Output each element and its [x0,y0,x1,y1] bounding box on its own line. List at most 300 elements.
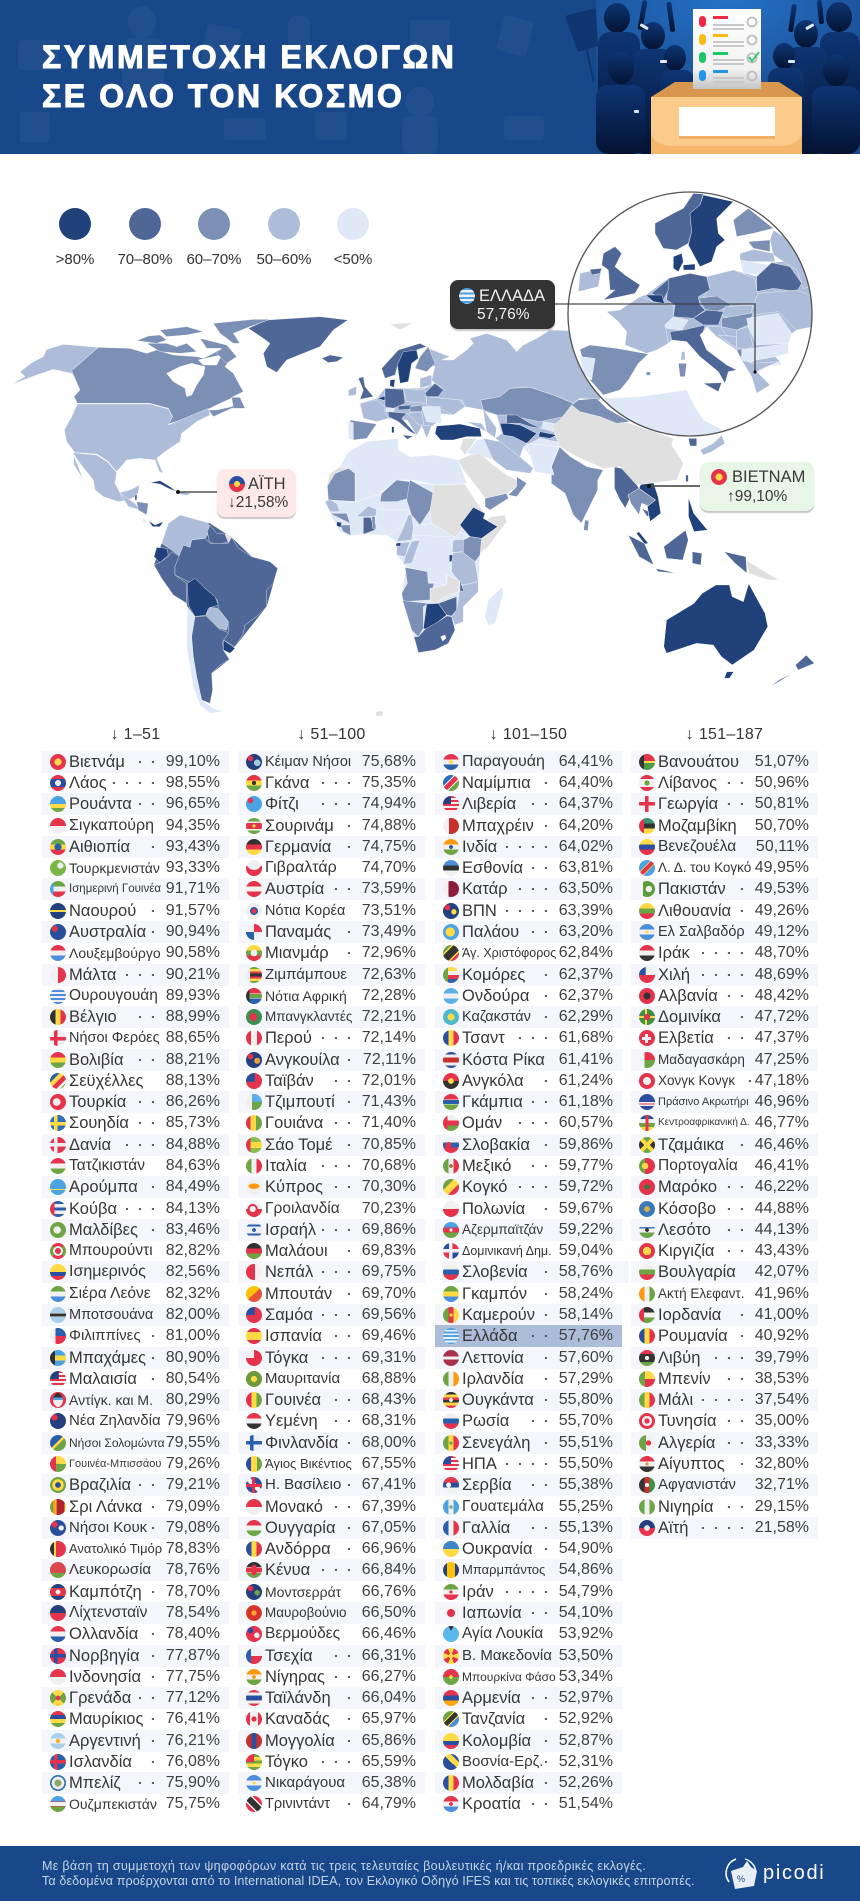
row: Παραγουάη: 64,41% [559,753,613,770]
logo: picodi [723,1856,820,1891]
row: Σάο Τομέ: 70,85% [362,1136,416,1153]
row: Τόγκο: 65,59% [362,1753,416,1770]
row: Μάλτα: Μάλτα [69,966,116,984]
row: Γουινέα-Μπισσάου: Γουινέα-Μπισσάου [69,1458,161,1470]
row: Νήσοι Σολομώντα [42,1432,229,1453]
row: Ελ Σαλβαδόρ: 49,12% [755,923,809,940]
row: Ανατολικό Τιμόρ: Ανατολικό Τιμόρ [69,1541,162,1556]
row: Νήσοι Σολομώντα: Νήσοι Σολομώντα [69,1436,165,1450]
row: Ουζμπεκιστάν: Ουζμπεκιστάν [69,1796,157,1812]
ranking column: 51-100 [238,751,425,1812]
row: Μπουρούντι: 82,82% [166,1242,220,1259]
row: Μπελίζ: 75,90% [166,1774,220,1791]
row: Νίγηρας: 66,27% [362,1668,416,1685]
row: Ιράκ: Ιράκ [658,944,690,962]
row: Ομάν: Ομάν [462,1114,502,1132]
row: Ινδία: 64,02% [559,838,613,855]
row: Πολωνία: 59,67% [559,1200,613,1217]
row: Ιαπωνία: Ιαπωνία [462,1604,522,1622]
row: Άγιος Βικέντιος [238,1453,425,1474]
row: Μογγολία: 65,86% [362,1732,416,1749]
row: Σλοβακία: 59,86% [559,1136,613,1153]
row: Γκαμπόν: 58,24% [559,1285,613,1302]
row: Άγ. Χριστόφορος [435,942,622,964]
row: Αργεντινή: 76,21% [166,1732,220,1749]
row: Τατζικιστάν: 84,63% [166,1157,220,1174]
row: Καμπότζη [50,1583,220,1601]
row: Αργεντινή: Αργεντινή [69,1732,141,1750]
row: Τουρκμενιστάν: 93,33% [166,859,220,876]
row: Μαλδίβες: Μαλδίβες [69,1221,138,1239]
row: Ιρλανδία [435,1368,622,1389]
row: Σαμόα [238,1304,425,1325]
row: ΒΠΝ [435,900,622,921]
row: Τσεχία: 66,31% [362,1646,416,1664]
row: Αρούμπα [42,1176,229,1198]
row: Βοσνία-Ερζ.: 52,31% [559,1753,613,1770]
row: Ιρλανδία: 57,29% [559,1370,613,1387]
row: Καναδάς [238,1708,425,1730]
row: Νιγηρία: 29,15% [755,1498,809,1515]
row: Γροιλανδία: Γροιλανδία [265,1200,340,1217]
row: Παναμάς: 73,49% [362,923,416,940]
row: Μπαρμπάντος: 54,86% [559,1561,613,1578]
row: Αυστραλία: 90,94% [166,923,220,940]
row: Αντίγκ. και Μ.: Αντίγκ. και Μ. [69,1392,153,1408]
row: Ουκρανία: Ουκρανία [462,1540,532,1558]
row: Κιργιζία: 43,43% [755,1242,809,1259]
callout: Vietnam [700,462,814,511]
row: Λιβύη: Λιβύη [658,1349,700,1367]
row: Ακτή Ελεφαντ.: 41,96% [755,1285,809,1302]
row: Η. Βασίλειο: Η. Βασίλειο [265,1476,341,1493]
row: Λάος [50,774,220,792]
row: Πορτογαλία: 46,41% [755,1157,809,1174]
row: Βενεζουέλα [631,836,818,857]
row: Κιργιζία [631,1240,818,1261]
row: Αυστραλία [42,921,229,942]
row: Τσαντ [435,1027,622,1049]
row: Αφγανιστάν: Αφγανιστάν [658,1476,736,1493]
row: Βολιβία: 88,21% [166,1051,220,1068]
row: Λιθουανία: 49,26% [755,902,809,919]
row: Ισλανδία: 76,08% [166,1753,220,1770]
row: Σαμόα: 69,56% [362,1306,416,1323]
row: Σερβία: Σερβία [462,1476,512,1494]
row: Ιταλία [246,1157,416,1175]
row: Καναδάς: 65,97% [362,1710,416,1727]
row: Γεωργία: 50,81% [755,795,809,812]
row: Γρενάδα: 77,12% [166,1689,220,1706]
row: Μπαχρέιν [435,815,622,836]
row: Γουινέα-Μπισσάου: 79,26% [166,1455,220,1472]
row: Αυστρία: Αυστρία [265,880,324,898]
logo: picodi: picodi [763,1862,825,1884]
row: Γροιλανδία: 70,23% [362,1200,416,1217]
row: Μπουρούντι: Μπουρούντι [69,1242,153,1259]
row: Τρινιντάντ: 64,79% [362,1795,416,1812]
inset: Balkans [707,313,792,393]
row: Ανδόρρα [238,1538,425,1559]
inset: Western Europe [578,247,710,395]
row: Λουξεμβούργο [50,944,220,961]
row: Μεξικό: Μεξικό [462,1157,511,1175]
row: Χιλή: Χιλή [658,966,690,984]
row: Ισημερινή Γουινέα: 91,71% [166,880,220,897]
row: Λ. Δ. του Κογκό [631,857,818,878]
row: Σιέρα Λεόνε [50,1285,220,1302]
row: Ισημερινή Γουινέα: Ισημερινή Γουινέα [69,883,161,895]
row: Ισραήλ: Ισραήλ [265,1221,316,1239]
row: Ισπανία: Ισπανία [265,1327,322,1345]
row: Ναμίμπια [435,772,622,793]
row: Χονγκ Κονγκ: Χονγκ Κονγκ [658,1073,735,1088]
row: Μπενίν: 38,53% [755,1370,809,1387]
row: Τανζανία: 52,92% [559,1710,613,1727]
row: Λίχτενσταϊν: Λίχτενσταϊν [69,1604,147,1621]
row: Μαλάουι [238,1240,425,1261]
legend: <50% [334,251,372,268]
row: Μπουρκίνα Φάσο [435,1666,622,1687]
row: Γουατεμάλα: 55,25% [559,1498,613,1515]
row: Αλβανία [631,985,818,1006]
row: Σλοβενία: Σλοβενία [462,1263,528,1281]
row: Σλοβακία: Σλοβακία [462,1136,530,1154]
row: Λεσότο: Λεσότο [658,1221,711,1239]
row: Ανγκόλα: 61,24% [559,1072,613,1089]
row: Μονακό [238,1496,425,1517]
row: Νέα Ζηλανδία: 79,96% [166,1412,220,1429]
row: Ζιμπάμπουε: 72,63% [362,966,416,982]
callout: Haiti: ↓21,58% [228,494,288,511]
row: Πακιστάν: 49,53% [755,880,809,897]
row: Σουρινάμ [246,817,416,835]
row: Κούβα: 84,13% [166,1200,220,1217]
row: Ναουρού: Ναουρού [69,902,136,920]
row: Λιβερία: Λιβερία [462,795,516,813]
row: Κόσοβο: Κόσοβο [658,1200,716,1218]
row: Ταϊβάν: 72,01% [362,1072,416,1089]
row: Κεντροαφρικανική Δ.: 46,77% [755,1114,809,1131]
row: Μπουτάν: Μπουτάν [265,1285,332,1303]
row: Άγ. Χριστόφορος: Άγ. Χριστόφορος [462,946,556,960]
row: Βοσνία-Ερζ.: Βοσνία-Ερζ. [462,1753,543,1770]
row: Μπαχάμες [42,1347,229,1368]
row: Ιαπωνία: 54,10% [559,1604,613,1621]
row: Καμπότζη: Καμπότζη [69,1583,142,1601]
row: Μογγολία [238,1730,425,1751]
row: Μπαχρέιν: 64,20% [559,817,613,834]
row: Βολιβία [42,1049,229,1070]
row: Ναουρού [50,902,220,920]
row: Τατζικιστάν: Τατζικιστάν [69,1157,145,1174]
row: Λεττονία [435,1347,622,1368]
row: Τρινιντάντ [238,1793,425,1815]
row: Ιράν: Ιράν [462,1583,494,1601]
row: Μοντσερράτ [238,1581,425,1602]
row: Καζακστάν: 62,29% [559,1008,613,1025]
row: Μαυρίκιος [50,1710,220,1728]
row: Πολωνία: Πολωνία [462,1200,525,1218]
row: Λιθουανία [631,900,818,921]
row: Ανγκόλα: Ανγκόλα [462,1072,524,1090]
row: Νικαράγουα: Νικαράγουα [265,1774,345,1791]
row: Τανζανία: Τανζανία [462,1710,525,1728]
leader line: Greece [554,304,757,374]
row: Γουινέα: 68,43% [362,1391,416,1408]
row: Εσθονία [435,857,622,878]
row: Γεωργία [631,793,818,815]
row: Μπαχρέιν: Μπαχρέιν [462,817,534,835]
row: Κογκό [435,1176,622,1198]
row: Σεϋχέλλες [50,1072,220,1090]
row: Κεντροαφρικανική Δ. [631,1112,818,1134]
row: Ισπανία [238,1325,425,1347]
row: Βιετνάμ [42,751,229,772]
row: Γκαμπόν [435,1283,622,1304]
row: Λιβύη [631,1347,818,1368]
row: Παραγουάη [435,751,622,772]
row: Βραζιλία: Βραζιλία [69,1476,131,1494]
row: Νεπάλ: Νεπάλ [265,1263,313,1281]
row: Ισλανδία: Ισλανδία [69,1753,132,1771]
row: Γκάνα [246,774,416,792]
row: Ονδούρα: Ονδούρα [462,987,529,1005]
row: Τατζικιστάν [50,1157,220,1174]
row: Παλάου: Παλάου [462,923,519,941]
row: Μπενίν [631,1368,818,1389]
row: Νέα Ζηλανδία [50,1412,220,1429]
illustration: crowd silhouettes [565,0,860,154]
row: Μοντσερράτ: 66,76% [362,1583,416,1600]
row: Βανουάτου [631,751,818,772]
row: Γουινέα-Μπισσάου [50,1455,220,1472]
row: Μαλδίβες: 83,46% [166,1221,220,1238]
row: Σερβία: 55,38% [559,1476,613,1493]
row: Καμπότζη: 78,70% [166,1583,220,1600]
row: ΒΠΝ: ΒΠΝ [462,902,497,920]
row: Λεσότο [631,1219,818,1240]
row: Ταϊλάνδη: 66,04% [362,1689,416,1706]
row: Μαρόκο [631,1176,818,1198]
row: Αίγυπτος [631,1453,818,1474]
row: Μογγολία: Μογγολία [265,1732,335,1750]
row: Δομινίκα [631,1006,818,1027]
row: Δανία: 84,88% [166,1136,220,1153]
map: Europe, Asia and northern Africa [322,323,603,510]
row: Ιορδανία [631,1304,818,1325]
row: Γερμανία: Γερμανία [265,838,331,856]
row: Μπαχάμες: Μπαχάμες [69,1349,146,1367]
row: Βενεζουέλα: 50,11% [756,838,809,855]
row: Ιαπωνία [435,1602,622,1623]
row: Μαδαγασκάρη: 47,25% [755,1051,809,1068]
row: Πορτογαλία [631,1155,818,1176]
row: Μολδαβία [435,1772,622,1793]
row: Χονγκ Κονγκ: 47,18% [755,1072,809,1089]
row: Λεσότο: 44,13% [755,1221,809,1238]
footer note [42,1859,702,1889]
row: Σαμόα: Σαμόα [265,1306,313,1324]
row: Λάος: Λάος [69,774,107,792]
row: Φινλανδία: Φινλανδία [265,1434,338,1452]
row: Ιράν [435,1581,622,1602]
row: Σενεγάλη: Σενεγάλη [462,1434,530,1452]
row: Τόγκα [238,1347,425,1368]
row: Άγιος Βικέντιος: Άγιος Βικέντιος [265,1456,352,1471]
row: Κομόρες: 62,37% [559,966,613,982]
row: Φιλιππίνες: Φιλιππίνες [69,1327,141,1344]
leader line: Vietnam [647,484,701,488]
row: Γκάνα: Γκάνα [265,774,309,792]
row: ΗΠΑ: 55,50% [559,1455,613,1472]
row: Ολλανδία [50,1625,220,1643]
row: Κροατία: Κροατία [462,1795,521,1813]
row: Ρωσία: 55,70% [559,1412,613,1429]
row: Νήσοι Σολομώντα: 79,55% [166,1434,220,1451]
row: Μπαρμπάντος: Μπαρμπάντος [462,1562,545,1577]
row: Ρωσία [435,1410,622,1432]
row: Ουκρανία [435,1538,622,1559]
row: Αιθιοπία [42,836,229,857]
row: Κατάρ: 63,50% [559,880,613,897]
row: Ουρουγουάη: 89,93% [166,987,220,1004]
callout: Greece: ΕΛΛΑΔΑ [479,287,545,305]
row: Δανία [42,1134,229,1155]
row: Εσθονία: 63,81% [559,859,613,876]
row: Σεϋχέλλες: Σεϋχέλλες [69,1072,143,1090]
row: Μπαχάμες: 80,90% [166,1349,220,1366]
row: Τουρκμενιστάν [50,859,220,876]
row: Αίγυπτος: 32,80% [755,1455,809,1472]
row: Βερμούδες [238,1623,425,1644]
row: Νήσοι Κουκ: 79,08% [166,1519,220,1536]
row: Γκάνα: 75,35% [362,774,416,791]
row: Βανουάτου: 51,07% [755,753,809,770]
row: Βερμούδες: 66,46% [362,1625,416,1642]
row: Δομινικανή Δημ.: Δομινικανή Δημ. [462,1244,552,1258]
ranking column: 1-51 [42,751,229,1812]
row: Αλγερία: 33,33% [755,1434,809,1451]
row: Κόστα Ρίκα: Κόστα Ρίκα [462,1051,545,1069]
row: Ολλανδία: 78,40% [166,1625,220,1642]
inset: Central Europe and Italy [665,296,753,392]
row: Ελβετία: Ελβετία [658,1029,714,1047]
row: Φίτζι: 74,94% [362,795,416,812]
row: Σρι Λάνκα: Σρι Λάνκα [69,1498,142,1516]
row: Δομινικανή Δημ.: 59,04% [559,1242,613,1259]
row: Ινδονησία: Ινδονησία [69,1668,141,1686]
footer note: Τα δεδομένα προέρχονται από το International IDEA, τον Εκλογικό Οδηγό IFES και τις τοπικές εκλογικές επιτροπές. [42,1874,695,1888]
inset: North Africa [603,390,723,437]
row: Μαρόκο: Μαρόκο [658,1178,717,1196]
row: Υεμένη [238,1410,425,1432]
row: Ζιμπάμπουε [238,964,425,985]
row: Ουκρανία: 54,90% [559,1540,613,1557]
row: Β. Μακεδονία [435,1644,622,1666]
row: Σλοβενία [435,1261,622,1283]
row: Μποτσουάνα [42,1304,229,1325]
row: Αργεντινή [42,1730,229,1751]
row: Τουρκμενιστάν: Τουρκμενιστάν [69,860,160,876]
row: Βανουάτου: Βανουάτου [658,753,739,771]
ranking column: 101-150 [435,751,622,1815]
row: Γουατεμάλα: Γουατεμάλα [462,1498,544,1515]
row: Δομινικανή Δημ. [435,1240,622,1261]
row: Νότια Αφρική: 72,28% [362,987,416,1004]
row: Ουγκάντα: 55,80% [559,1391,613,1408]
row: Ρουμανία: Ρουμανία [658,1327,728,1345]
row: Αζερμπαϊτζάν [435,1219,622,1240]
row: Μαυρίκιος: Μαυρίκιος [69,1710,143,1728]
row: Ουγγαρία [238,1517,425,1538]
row: Ναουρού: 91,57% [166,902,220,919]
row: Τσαντ: 61,68% [559,1029,613,1046]
row: Νότια Κορέα: 73,51% [362,902,416,919]
row: Κόσοβο [631,1198,818,1219]
column heading: 101-150: ↓ 101–150 [490,726,567,743]
row: Βουλγαρία: 42,07% [755,1263,809,1280]
row: Άγιος Βικέντιος: 67,55% [362,1455,416,1472]
logo: picodi: % [737,1874,745,1884]
row: Περού [246,1029,416,1047]
row: Νότια Αφρική: Νότια Αφρική [265,988,347,1004]
legend: 60–70% [186,251,242,268]
row: Βραζιλία [42,1474,229,1496]
row: Αρούμπα: 84,49% [166,1178,220,1195]
row: Ιράκ: 48,70% [755,944,809,961]
row: Μαλάουι: Μαλάουι [265,1242,328,1260]
row: Τόγκο: Τόγκο [265,1753,308,1771]
row: Αϊτή: 21,58% [755,1519,809,1536]
row: Βολιβία: Βολιβία [69,1051,123,1069]
map: North America [10,317,348,527]
row: Κούβα [50,1200,220,1218]
row: Μπανγκλαντές: 72,21% [362,1008,416,1025]
row: Κατάρ: Κατάρ [462,880,508,898]
row: Κιργιζία: Κιργιζία [658,1242,714,1260]
row: Κεντροαφρικανική Δ.: Κεντροαφρικανική Δ. [658,1117,750,1128]
row: Κροατία [435,1793,622,1815]
row: ΗΠΑ [435,1453,622,1474]
row: Βιετνάμ: Βιετνάμ [69,753,125,771]
row: Μιανμάρ: Μιανμάρ [265,944,329,962]
legend [56,208,372,268]
row: Ιράν: 54,79% [559,1583,613,1600]
row: Μαδαγασκάρη: Μαδαγασκάρη [658,1052,745,1067]
row: Μαυριτανία: 68,88% [362,1370,416,1387]
row: Ανδόρρα: Ανδόρρα [265,1540,331,1558]
row: Κέιμαν Νήσοι: Κέιμαν Νήσοι [265,754,351,770]
row: Αγία Λουκία: 53,92% [559,1625,613,1642]
row: Ουγκάντα [435,1389,622,1410]
row: Μαρόκο: 46,22% [755,1178,809,1195]
row: Βενεζουέλα: Βενεζουέλα [658,838,736,855]
row: Κύπρος: Κύπρος [265,1178,323,1196]
row: Ολλανδία: Ολλανδία [69,1625,138,1643]
row: Πράσινο Ακρωτήρι: Πράσινο Ακρωτήρι [658,1096,749,1108]
row: Σιγκαπούρη [50,817,220,834]
row: Παραγουάη: Παραγουάη [462,753,545,770]
row: Μαυροβούνιο: Μαυροβούνιο [265,1605,347,1620]
row: Νικαράγουα: 65,38% [362,1774,416,1791]
row: Φινλανδία [238,1432,425,1453]
row: Μπουτάν: 69,70% [362,1285,416,1302]
row: Χιλή: 48,69% [755,966,809,982]
row: Ρουμανία [631,1325,818,1347]
row: Αυστρία [238,878,425,900]
callout: Greece [450,280,555,329]
